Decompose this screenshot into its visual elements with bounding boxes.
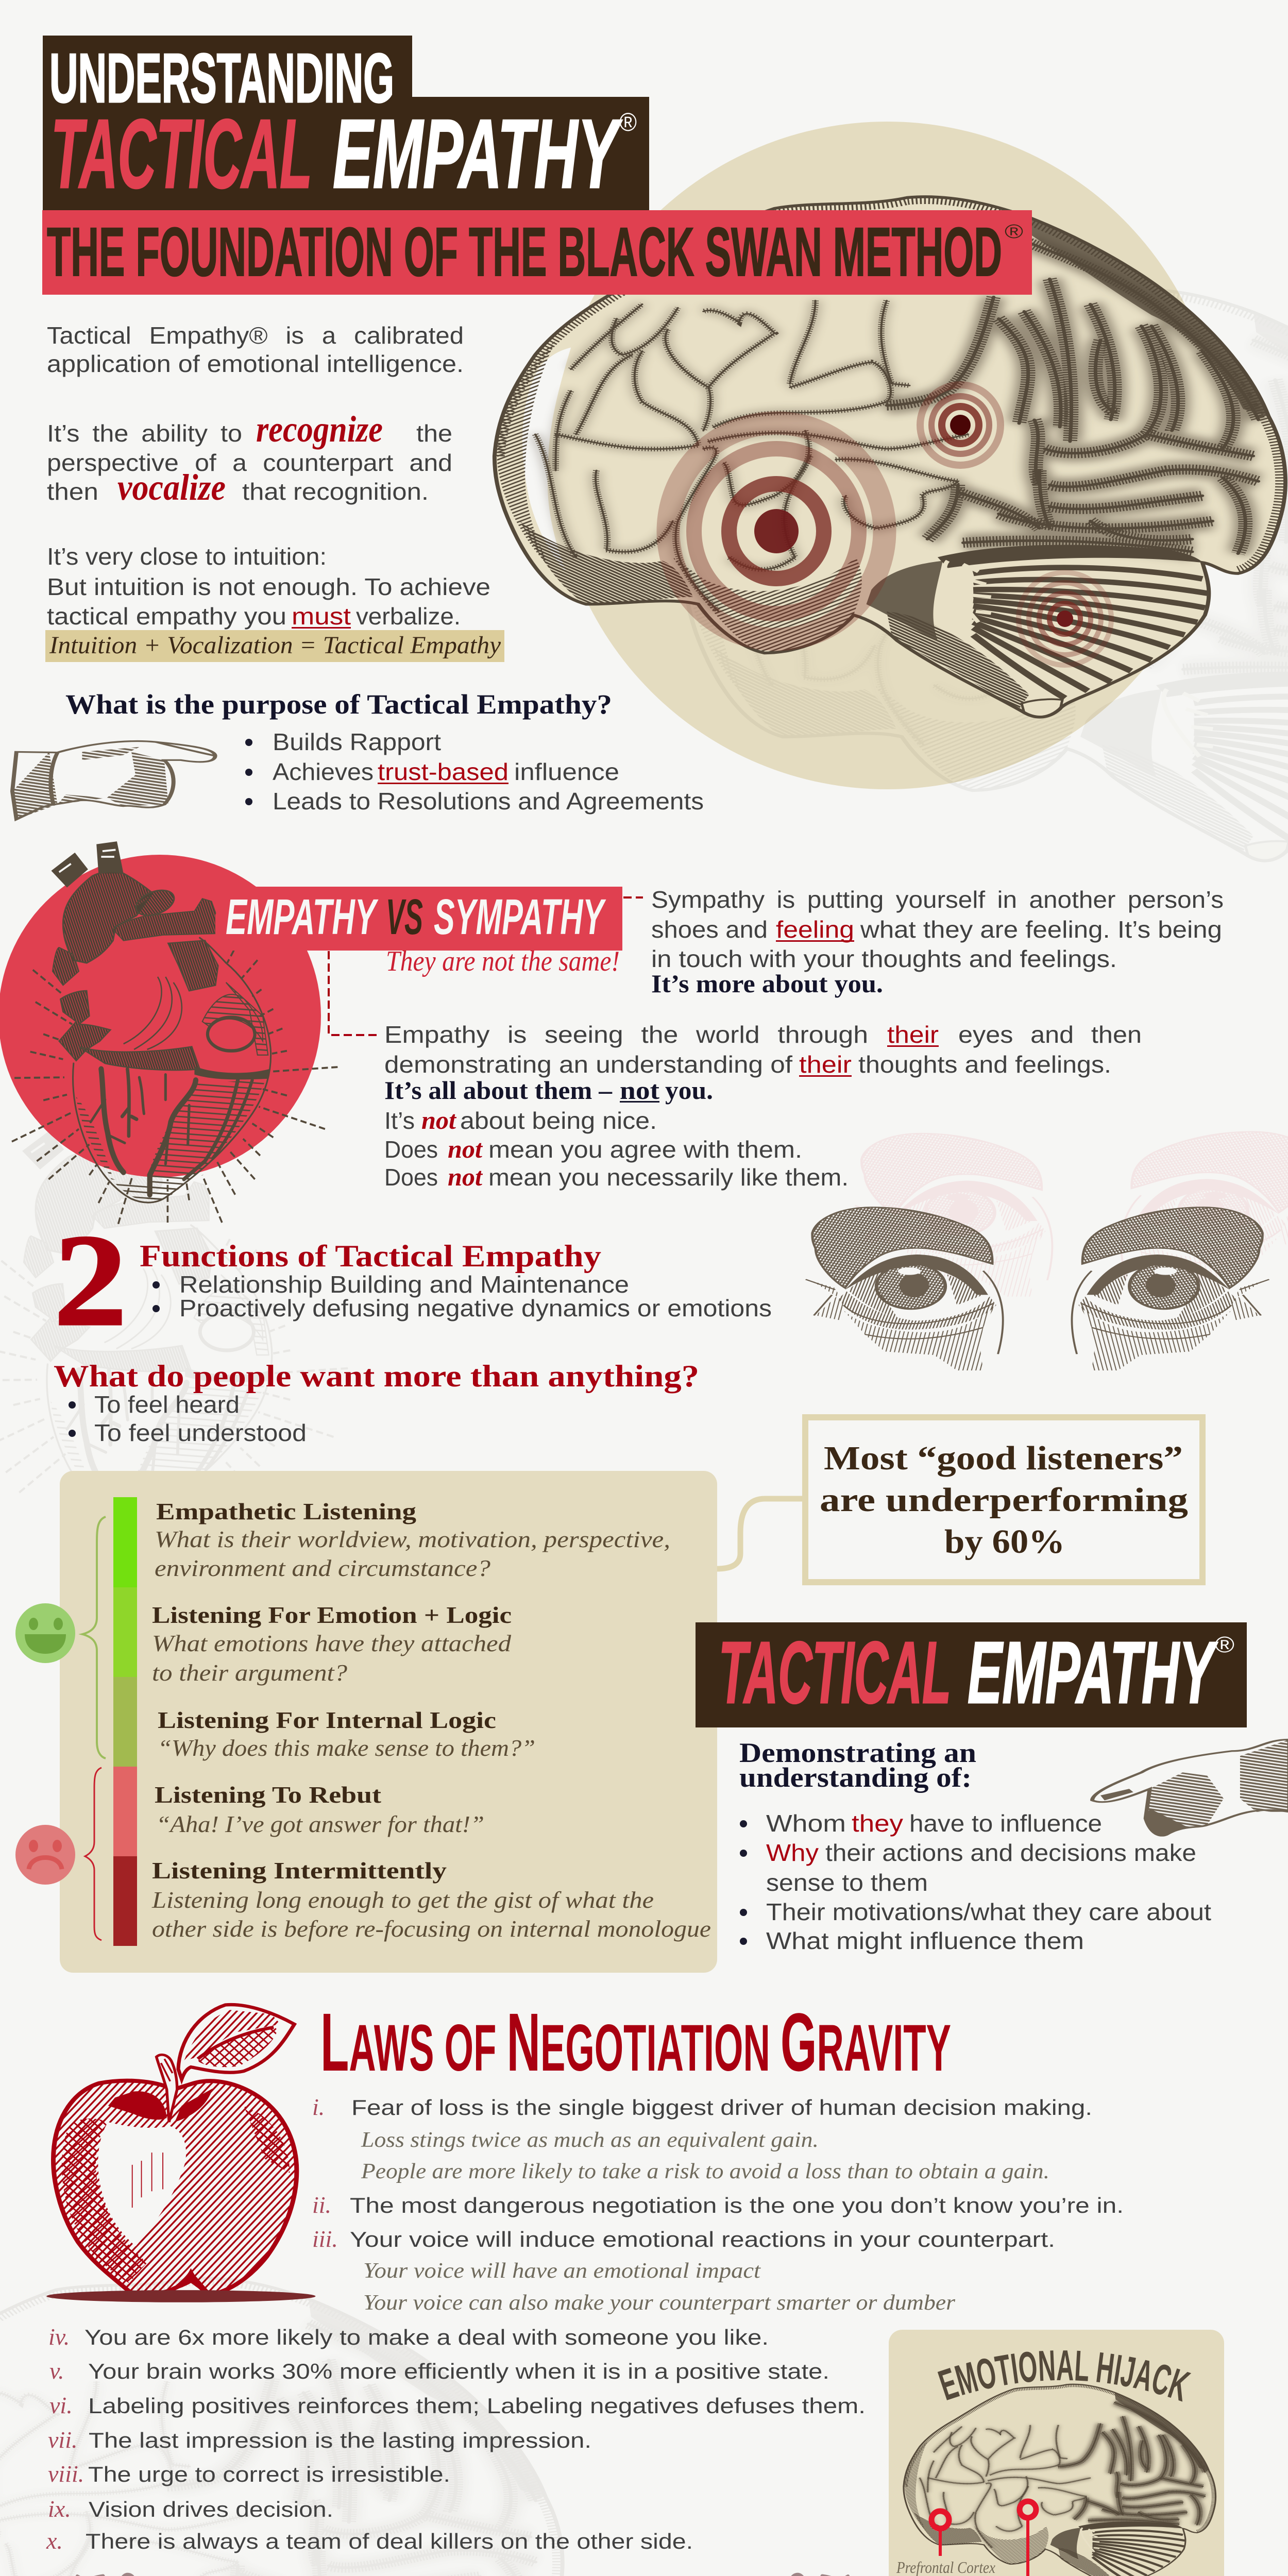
text: empathy definition [384,1021,1142,1191]
intro text: recognize and vocalize [47,409,452,508]
ghost brain watermark top right [685,290,1288,861]
list: laws i to iii: iii. [312,2226,338,2252]
list: laws i to iii: Your voice will induce emotional reactions in your counterpart. [350,2227,1055,2251]
beige circle behind brain [553,122,1221,789]
pin: prefrontal cortex: Prefrontal Cortex [896,2558,995,2576]
heading: demonstrating an understanding: understanding of: [739,1762,972,1793]
text: empathy definition: about being nice. [460,1107,657,1134]
ghost brain watermark lower left [0,2278,563,2576]
level 2 text [152,1602,512,1686]
callout: good listeners: by 60% [944,1523,1065,1561]
level 5 text: Listening Intermittently [152,1857,447,1884]
intro text: close to intuition: But intuition is not enough. To achieve [47,573,490,600]
list: laws i to iii: Your voice will have an emotional impact [363,2259,761,2283]
text: empathy definition: thoughts and feelings. [858,1051,1111,1078]
intro text: recognize and vocalize: perspective of a counterpart and [47,449,452,476]
level 2 text: What emotions have they attached [152,1630,512,1656]
text: empathy definition: Does [384,1164,438,1191]
list: laws iv to x: The last impression is the lasting impression. [89,2428,591,2452]
list: laws i to iii: Your voice can also make your counterpart smarter or dumber [363,2291,956,2315]
intro text: close to intuition: tactical empathy you [47,603,286,630]
icon: sad face [15,1825,75,1885]
heading: functions of tactical empathy: Functions of Tactical Empathy [140,1239,601,1273]
banner: tactical empathy: ® [1215,1632,1234,1657]
brace: red [85,1768,101,1940]
list: functions: Relationship Building and Maintenance [179,1271,629,1298]
intro text: recognize and vocalize: the [416,420,452,447]
level 1 text: environment and circumstance? [155,1555,490,1581]
title: understanding tactical empathy block: EMPATHY [333,99,622,209]
list: feel heard and understood: To feel heard [94,1391,240,1418]
brace: green [82,1517,106,1758]
heading: laws of negotiation gravity: LAWS OF NEGOTIATION GRAVITY [320,1996,951,2088]
highlight: formula: Intuition + Vocalization = Tactical Empathy [49,632,501,659]
heading: demonstrating an understanding: Demonstrating an [739,1737,976,1768]
tagline: they are not the same: They are not the same! [386,945,620,977]
heading: demonstrating an understanding [739,1737,976,1793]
list: laws iv to x: viii. [48,2461,84,2487]
text: empathy definition: their [887,1021,939,1048]
list: demonstrating bullets: have to influence [909,1810,1102,1837]
callout: good listeners: are underperforming [820,1481,1188,1519]
list: laws iv to x: The urge to correct is irresistible. [88,2462,450,2486]
text: empathy definition: It’s all about them – [384,1076,613,1105]
level 1 text [155,1498,670,1581]
ghost heart watermark [0,1118,348,1542]
title: understanding tactical empathy block [43,36,649,211]
text: empathy definition: not [448,1134,483,1163]
level 4 text: “Aha! I’ve got answer for that!” [156,1811,484,1837]
intro text: close to intuition: verbalize. [356,603,461,630]
level 3 text: “Why does this make sense to them?” [158,1735,535,1761]
list: laws iv to x [46,2324,866,2554]
intro text: definition [47,322,464,377]
intro text: close to intuition [47,543,490,630]
intro text: recognize and vocalize: that recognition. [242,478,429,505]
list: laws iv to x: x. [46,2528,63,2554]
list: demonstrating bullets: Whom [766,1810,846,1837]
list: laws iv to x: ix. [48,2496,71,2522]
text: empathy definition: Empathy is seeing the world through [384,1021,868,1048]
level 5 text: other side is before re-focusing on internal monologue [152,1916,711,1942]
list: demonstrating bullets: What might influence them [766,1927,1084,1954]
ornament: right scroll [790,2574,867,2576]
list: purpose bullets: Leads to Resolutions and Agreements [273,788,704,815]
text: sympathy definition [651,886,1224,998]
text: empathy definition: their [799,1051,852,1078]
list: laws i to iii: People are more likely to take a risk to avoid a loss than to obtain a gain. [361,2160,1049,2183]
level 2 text: Listening For Emotion + Logic [152,1602,512,1628]
level 2 text: to their argument? [152,1659,347,1686]
title: understanding tactical empathy block: UNDERSTANDING [49,39,394,117]
intro text: recognize and vocalize: vocalize [117,467,226,508]
banner: empathy vs sympathy: SYMPATHY [434,889,606,945]
text: sympathy definition: shoes and [651,916,768,943]
banner: empathy vs sympathy: VS [386,889,423,945]
level 3 text [158,1707,535,1761]
text: empathy definition: eyes and then [958,1021,1142,1048]
icon: happy face [15,1603,75,1663]
list: laws iv to x: Vision drives decision. [89,2497,333,2521]
banner: empathy vs sympathy [215,887,622,951]
text: empathy definition: demonstrating an understanding of [384,1051,792,1078]
title: understanding tactical empathy block: TACTICAL [51,99,312,209]
small brain [904,2384,1216,2576]
panel: listening levels [60,1471,717,1973]
arched title: EMOTIONAL HIJACK [938,2350,1191,2402]
list: laws i to iii: i. [312,2094,325,2120]
text: sympathy definition: It’s more about you. [651,969,883,998]
intro text: recognize and vocalize: then [47,478,98,505]
text: empathy definition: not [421,1106,457,1134]
list: laws iv to x: v. [49,2358,64,2384]
list: demonstrating bullets: their actions and decisions make [825,1839,1196,1866]
banner: empathy vs sympathy: EMPATHY [226,889,379,945]
heading: what do people want: What do people want more than anything? [54,1359,699,1393]
list: demonstrating bullets: Why [766,1839,819,1866]
list: purpose bullets: Builds Rapport [273,728,441,755]
list: functions [152,1271,772,1321]
list: purpose bullets: influence [514,758,619,785]
level 3 text: Listening For Internal Logic [158,1707,496,1733]
callout: good listeners [805,1417,1202,1582]
title: understanding tactical empathy block: ® [619,108,637,137]
dashed connectors [329,897,643,1035]
banner: tactical empathy: TACTICAL [719,1624,951,1722]
list: laws iv to x: Labeling positives reinforces them; Labeling negatives defuses them. [88,2394,866,2418]
list: functions: Proactively defusing negative dynamics or emotions [179,1295,772,1321]
list: laws i to iii [312,2094,1124,2315]
icon: pointing hand right [12,741,215,819]
intro text: recognize and vocalize: recognize [256,409,383,450]
intro text: recognize and vocalize: It’s the ability to [47,420,242,447]
illustration: red apple [46,2005,315,2302]
level 4 text: Listening To Rebut [155,1782,382,1808]
list: laws iv to x: iv. [48,2324,70,2350]
pin: amygdala [997,2501,1056,2576]
text: empathy definition: mean you agree with them. [488,1136,802,1163]
list: feel heard and understood [69,1391,307,1446]
big numeral 2: 2 [54,1208,127,1353]
text: empathy definition: you. [665,1076,713,1105]
ornament: left scroll [59,2574,135,2576]
list: purpose bullets: trust-based [378,758,509,785]
level 4 text [155,1782,484,1837]
callout: good listeners: Most “good listeners” [824,1439,1183,1477]
illustration: two eyes with pink ghost [806,1132,1288,1370]
list: purpose bullets [245,728,704,815]
icon: pointing hand left [1092,1739,1288,1836]
list: demonstrating bullets: sense to them [766,1869,928,1896]
illustration: red circle with heart [0,841,337,1224]
level 1 text: Empathetic Listening [156,1498,416,1524]
pin: prefrontal cortex [896,2511,995,2576]
intro text: close to intuition: must [292,603,351,630]
callout connector [717,1499,802,1569]
intro text: definition: application of emotional intelligence. [47,350,464,377]
text: empathy definition: It’s [384,1107,415,1134]
level 5 text [151,1857,711,1942]
level 5 text: Listening long enough to get the gist of what the [151,1887,654,1913]
text: sympathy definition: feeling [776,916,854,943]
list: laws i to iii: ii. [312,2192,331,2218]
text: sympathy definition: in touch with your thoughts and feelings. [651,945,1117,972]
list: laws i to iii: The most dangerous negotiation is the one you don’t know you’re in. [350,2193,1124,2217]
text: empathy definition: not [448,1162,483,1191]
list: laws iv to x: vi. [49,2392,73,2418]
list: purpose bullets: Achieves [273,758,374,785]
list: laws iv to x: You are 6x more likely to make a deal with someone you like. [84,2325,769,2349]
level 1 text: What is their worldview, motivation, perspective, [155,1526,670,1552]
heading: purpose: What is the purpose of Tactical Empathy? [65,689,612,720]
list: laws i to iii: Fear of loss is the single biggest driver of human decision making. [351,2095,1092,2120]
list: laws iv to x: There is always a team of deal killers on the other side. [86,2529,693,2553]
text: empathy definition: mean you necessarily like them. [488,1164,849,1191]
panel: emotional hijack [889,2330,1224,2576]
illustration: engraved brain with targets [495,197,1285,717]
list: demonstrating bullets [740,1810,1211,1954]
list: laws iv to x: Your brain works 30% more efficiently when it is in a positive state. [88,2359,829,2383]
text: sympathy definition: what they are feeling. It’s being [860,916,1222,943]
text: empathy definition: Does [384,1136,438,1163]
level bars [113,1497,137,1946]
intro text: definition: Tactical Empathy® is a calibrated [47,322,464,349]
list: demonstrating bullets: they [852,1810,903,1837]
intro text: close to intuition: It’s very close to intuition: [47,543,327,570]
text: sympathy definition: Sympathy is putting yourself in another person’s [651,886,1224,913]
list: demonstrating bullets: Their motivations/what they care about [766,1899,1211,1925]
subtitle banner: the foundation of the black swan method: ® [1005,221,1023,243]
list: laws iv to x: vii. [48,2427,77,2453]
text: empathy definition: not [620,1076,659,1105]
list: laws i to iii: Loss stings twice as much as an equivalent gain. [361,2128,819,2152]
list: feel heard and understood: To feel understood [94,1419,307,1446]
